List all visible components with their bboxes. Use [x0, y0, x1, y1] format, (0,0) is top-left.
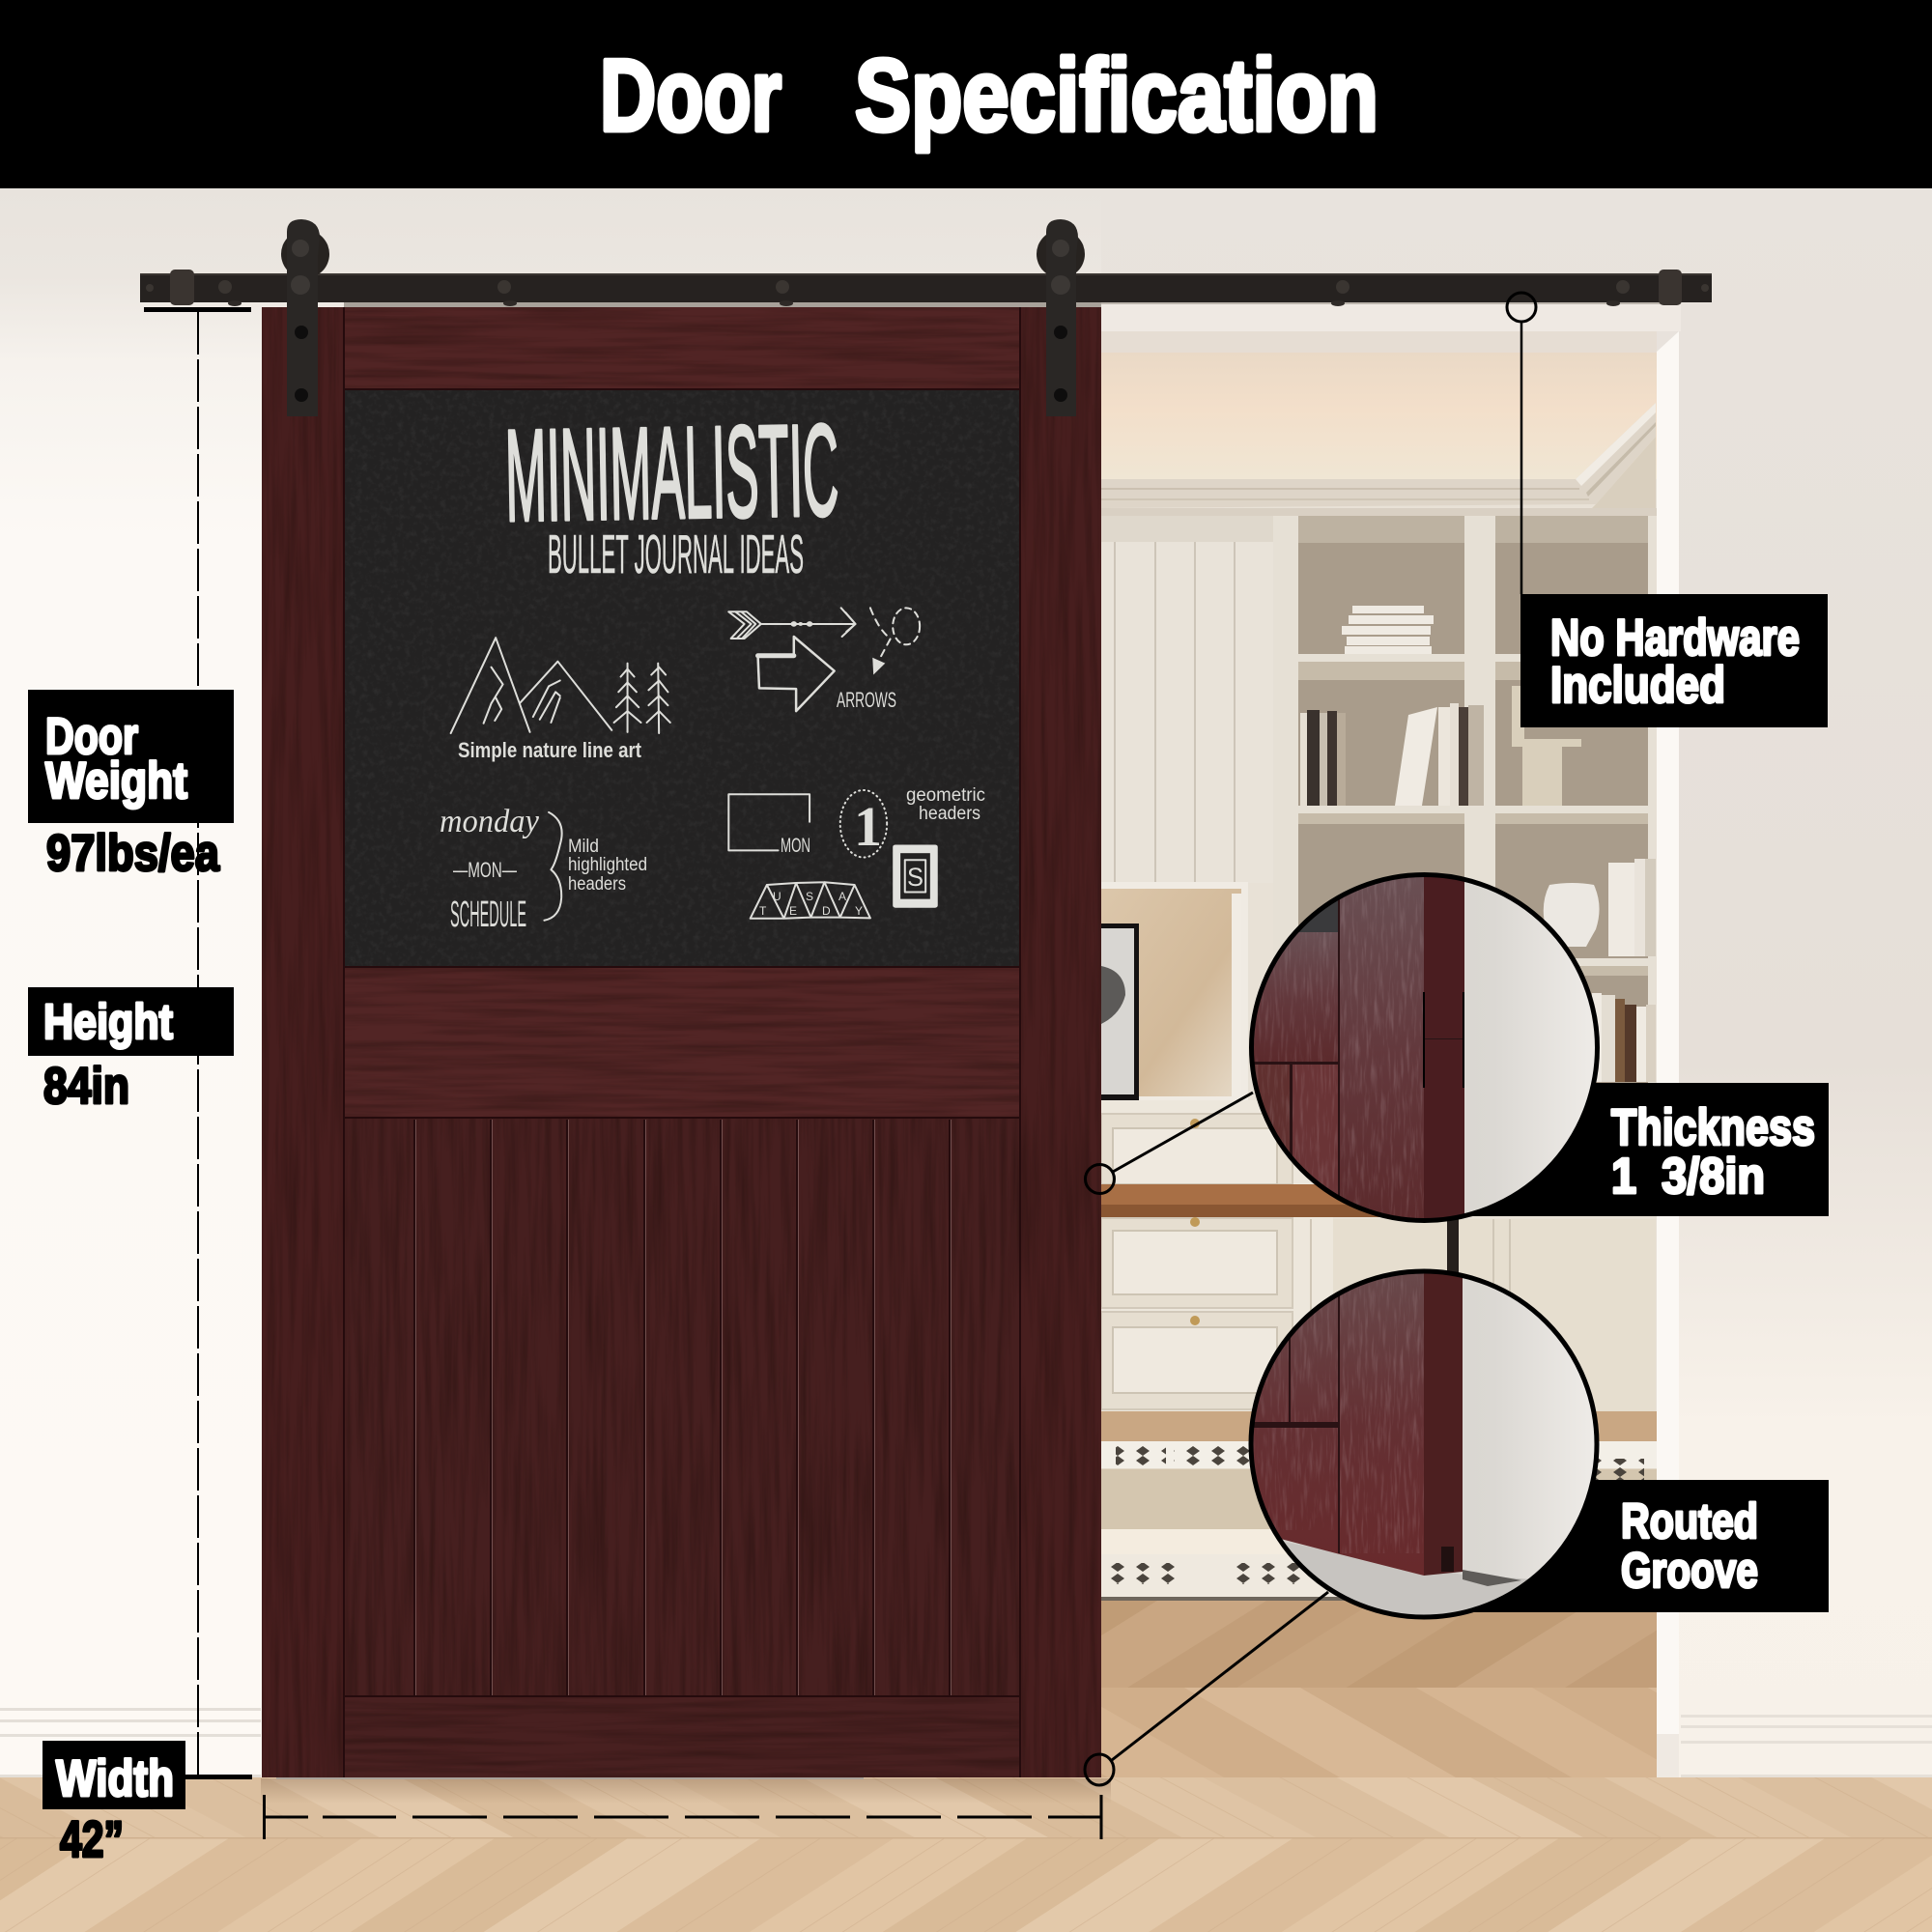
- chalkboard panel: MINIMALISTIC: [504, 397, 839, 549]
- label: no hardware included: No Hardware: [1550, 610, 1800, 667]
- chalk captions: T: [759, 904, 767, 918]
- width dimension line: [265, 1795, 1101, 1839]
- label: thickness: [1449, 1083, 1829, 1216]
- chalk captions: Y: [855, 904, 863, 918]
- chalk captions: monday: [440, 804, 540, 839]
- crown moulding: [1101, 403, 1657, 516]
- left hanger: [281, 219, 329, 416]
- title: Door: [600, 39, 781, 153]
- chalkboard panel: BULLET JOURNAL IDEAS: [548, 524, 804, 585]
- sliding rail: [140, 270, 1712, 307]
- label: door weight: [28, 690, 234, 823]
- chalk captions: [440, 688, 985, 935]
- chalk captions: MON: [781, 835, 810, 857]
- chalk captions: headers: [568, 874, 626, 895]
- label: routed groove: Groove: [1621, 1543, 1758, 1598]
- label: height: Height: [43, 994, 173, 1049]
- chalk captions: highlighted: [568, 855, 647, 875]
- detail circle: door thickness: [1251, 874, 1599, 1224]
- label: routed groove: Routed: [1621, 1493, 1758, 1548]
- value: height: 84in: [43, 1058, 129, 1115]
- detail circle: routed groove: [1251, 1271, 1604, 1619]
- callout: thickness marker and leader: [1086, 1093, 1253, 1194]
- chalk captions: E: [789, 904, 797, 918]
- chalk captions: headers: [919, 804, 980, 824]
- chalk doodles: [451, 608, 938, 921]
- label: no hardware included: [1520, 594, 1828, 727]
- door frame stiles and rails: [262, 307, 1101, 1777]
- chalk captions: S: [907, 863, 923, 892]
- rug and room floor: [1101, 1411, 1657, 1777]
- chalk captions: 1: [854, 795, 882, 858]
- rail stoppers: [170, 270, 1682, 305]
- chalk captions: Simple nature line art: [458, 738, 642, 762]
- label: no hardware included: Included: [1550, 657, 1725, 714]
- title: Specification: [855, 39, 1378, 153]
- label: door weight: Weight: [45, 753, 187, 810]
- left baseboard: [0, 1708, 261, 1777]
- chalk captions: U: [773, 890, 781, 903]
- bookcase: [1273, 516, 1656, 1105]
- right wall baseboard: [1681, 1715, 1932, 1777]
- barn door: [262, 307, 1101, 1779]
- chalk captions: geometric: [906, 785, 985, 806]
- label: width: Width: [56, 1750, 174, 1807]
- chalk captions: ARROWS: [837, 688, 896, 712]
- chalk captions: D: [822, 904, 831, 918]
- chalk captions: —MON—: [453, 858, 517, 882]
- chalk captions: SCHEDULE: [450, 895, 526, 935]
- cabinets and desk: [1101, 1100, 1656, 1411]
- chalk captions: A: [838, 890, 846, 903]
- chalk captions: Mild: [568, 837, 599, 857]
- label: door weight: Door: [45, 708, 138, 765]
- label: thickness: 1 3/8in: [1611, 1149, 1765, 1205]
- chalk captions: S: [806, 890, 813, 903]
- chalkboard panel: [345, 390, 1019, 966]
- height dimension line: [144, 307, 252, 1779]
- books and decor: [1300, 606, 1656, 1082]
- title bar: [0, 0, 1932, 188]
- framed art: [1101, 882, 1248, 1100]
- room seen through the opening: [1101, 302, 1681, 1777]
- label: routed groove: [1449, 1480, 1829, 1612]
- lower plank panel: [344, 1118, 1020, 1696]
- right hanger: [1037, 219, 1085, 416]
- callout: groove marker and leader: [1085, 1592, 1328, 1785]
- label: thickness: Thickness: [1611, 1099, 1815, 1156]
- beadboard wall: [1101, 516, 1273, 883]
- door opening jamb: [1657, 331, 1679, 1777]
- value: width: 42”: [60, 1811, 124, 1868]
- value: door weight: 97lbs/ea: [46, 825, 219, 882]
- callout: rail marker and leader: [1507, 293, 1536, 594]
- label: height: [28, 987, 234, 1056]
